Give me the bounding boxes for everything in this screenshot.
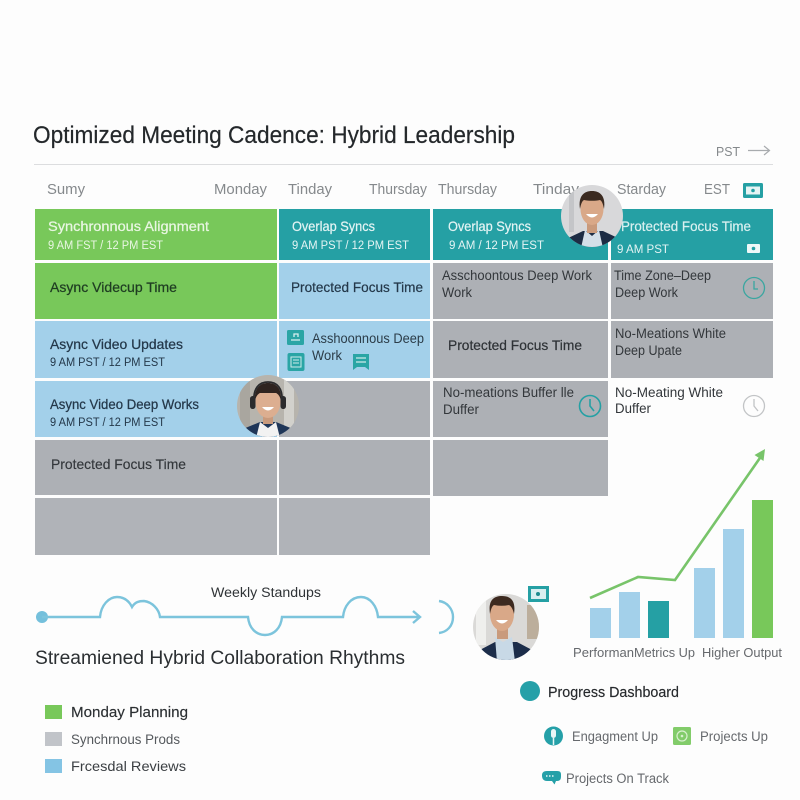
icon: teal bookmark [353,354,369,370]
chart labels [573,645,782,660]
cell: Overlap Syncs column 2: 9 AM PST / 12 PM EST [292,240,409,252]
cell: Protected Focus Time column 4: 9 AM PST [617,244,669,256]
cell: Protected Focus Time column 1: Protected Focus Time [51,456,186,472]
cell: Async Video Deep Works: Async Video Deep Works [50,396,199,412]
icon: teal screen [287,330,304,345]
column 3 cells [433,209,608,496]
PST time zone arrow: PST [716,144,740,159]
cell: Time Zone-Deep: Deep Work [615,285,678,300]
metric: Engagment Up [544,726,658,746]
cell: Async Video Deep Works: 9 AM PST / 12 PM EST [50,417,165,429]
cell: Asschoontous Deep Work: Work [442,285,472,300]
trend arrow [590,449,765,598]
cell: Time Zone-Deep: Time Zone–Deep [614,268,711,283]
cell: Asshoonnous Deep Work column 2 [312,331,424,363]
avatar: headset presenter [236,374,300,438]
cell: Overlap Syncs column 2 [292,218,409,252]
cell: Protected Focus Time column 3: Protected Focus Time [448,337,582,353]
cell: Async Video Deep Works [50,396,199,429]
cell: Asshoonnous Deep Work column 2: Asshoonnous Deep [312,331,424,346]
cell: No-Meations White: Deep Upate [615,343,682,358]
cell: Async Videcup Time: Async Videcup Time [50,279,177,295]
cell: Synchronnous Alignment: Synchronnous Alignment [48,218,209,234]
day header row: Monday [214,181,267,198]
cell: Overlap Syncs column 2: Overlap Syncs [292,218,375,234]
cell: Overlap Syncs column 3: 9 AM / 12 PM EST [449,240,544,252]
schedule grid [35,209,773,555]
cell: No-Meations White [615,326,726,358]
cell: No-meations Buffer: Duffer [443,402,479,417]
day header row: Thursday [438,181,497,198]
avatar: bottom presenter [472,593,540,662]
column 4 cells [611,209,773,378]
avatar: top presenter [560,184,626,248]
metric: Projects Up: Projects Up [700,729,768,744]
cell: Asschoontous Deep Work: Asschoontous Deep Work [442,268,592,283]
column 2 cells [279,209,430,555]
metric: Projects Up [673,727,768,745]
cell: No-meations Buffer: No-meations Buffer lle [443,385,574,400]
cell: Protected Focus Time column 4 [617,218,751,256]
icon: EST camera [743,183,763,198]
day header row [47,181,730,198]
day header row: Starday [617,181,666,198]
icon: clock grey [744,396,764,416]
title: Optimized Meeting Cadence: Hybrid Leadership [33,122,515,149]
progress dashboard heading: Progress Dashboard [548,685,679,701]
cell: Synchronnous Alignment [48,218,209,252]
cell: Protected Focus Time column 4: Protected Focus Time [621,218,751,234]
rhythm timeline [36,597,453,635]
metric: Engagment Up: Engagment Up [572,729,658,744]
cell: No-Meating White: No-Meating White [615,385,723,400]
cell: No-meations Buffer [443,385,574,417]
cell: Overlap Syncs column 3: Overlap Syncs [448,218,531,234]
metric: Projects On Track: Projects On Track [566,771,669,786]
icon: clock teal column 4 [744,278,764,298]
cell: No-Meating White: Duffer [615,401,651,416]
cell: Time Zone-Deep [614,268,711,300]
column 1 cells [35,209,277,555]
chart labels: Performan [573,645,634,660]
chart labels: Higher Output [702,645,782,660]
cell: No-Meating White [615,385,723,416]
icon: avatar camera badge [528,586,549,602]
day header row: EST [704,181,730,198]
cell: Protected Focus Time column 2: Protected Focus Time [291,279,423,295]
legend: Synchrnous Prods [71,732,180,747]
cell: Async Video Updates: Async Video Updates [50,336,183,352]
PST time zone arrow [716,144,770,159]
legend: Frcesdal Reviews [71,758,186,774]
progress dashboard heading [520,681,679,701]
legend [45,705,188,774]
day header row: Sumy [47,181,85,198]
icon: clock teal column 3 [580,396,600,416]
icon: teal document [288,353,304,371]
cell: Overlap Syncs column 3 [448,218,544,252]
cell: Asshoonnous Deep Work column 2: Work [312,348,342,363]
heading: Streamiened Hybrid Collaboration Rhythms: Streamiened Hybrid Collaboration Rhythms [35,648,405,669]
legend: Monday Planning [71,705,188,721]
chart labels: Metrics Up [634,645,695,660]
bar chart [590,500,773,638]
day header row: Thursday [369,181,427,198]
day header row: Tinday [288,181,332,198]
cell: Asschoontous Deep Work [442,268,592,300]
cell: Async Video Updates: 9 AM PST / 12 PM EST [50,357,165,369]
cell: No-Meations White: No-Meations White [615,326,726,341]
icon: white camera [747,244,760,253]
day header row: Tinday [533,181,580,198]
cell: Synchronnous Alignment: 9 AM FST / 12 PM EST [48,240,163,252]
label: Weekly Standups: Weekly Standups [211,585,321,600]
cell: Async Video Updates [50,336,183,369]
